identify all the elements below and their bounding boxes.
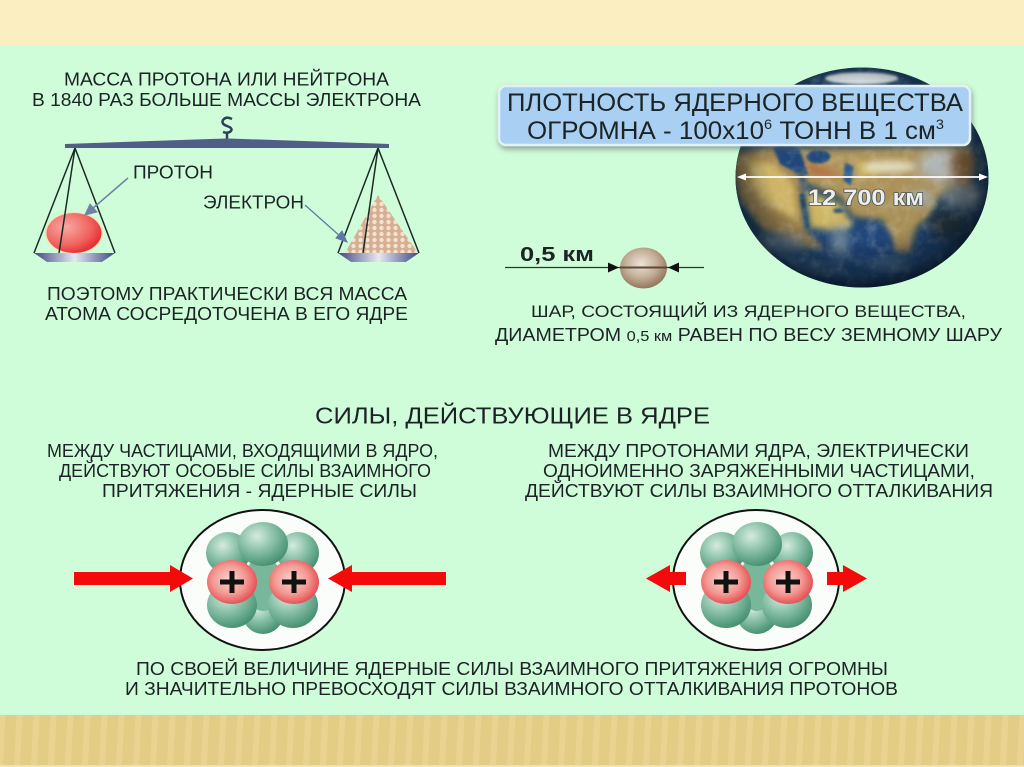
electron pile [345, 195, 418, 253]
repulsion line 1: МЕЖДУ ПРОТОНАМИ ЯДРА, ЭЛЕКТРИЧЕСКИ [548, 441, 969, 461]
diagram: attraction nucleus [74, 510, 446, 650]
right pan [338, 253, 419, 262]
heading: second line: В 1840 РАЗ БОЛЬШЕ МАССЫ ЭЛЕКТРОНА [32, 90, 421, 110]
diagram: repulsion nucleus [646, 510, 867, 650]
text block: proton repulsion [525, 441, 993, 501]
arrow: inward right [328, 565, 446, 592]
left pan strings [34, 148, 115, 253]
callout line 2: ОГРОМНА - 100х10 [527, 117, 755, 145]
callout line 2: 3 [936, 116, 944, 132]
proton right [269, 560, 319, 604]
callout line 2: ТОНН В 1 см [772, 117, 936, 145]
conclusion text line 1: ПОЭТОМУ ПРАКТИЧЕСКИ ВСЯ МАССА [47, 284, 407, 304]
proton ball [45, 212, 103, 254]
earth land and clouds [730, 72, 985, 287]
dimension arrowheads [608, 262, 679, 272]
proton left [701, 560, 751, 604]
callout line 2: 6 [764, 116, 772, 132]
label: earth diameter: 12 700 км [808, 185, 924, 210]
conclusion line 1: ПО СВОЕЙ ВЕЛИЧИНЕ ЯДЕРНЫЕ СИЛЫ ВЗАИМНОГО ПРИТЯЖЕНИЯ ОГРОМНЫ [136, 658, 888, 679]
heading: forces in nucleus: СИЛЫ, ДЕЙСТВУЮЩИЕ В ЯДРЕ [315, 402, 710, 428]
conclusion line 2: И ЗНАЧИТЕЛЬНО ПРЕВОСХОДЯТ СИЛЫ ВЗАИМНОГО ОТТАЛКИВАНИЯ ПРОТОНОВ [125, 679, 898, 699]
nucleons [700, 522, 813, 634]
dimension line [505, 266, 704, 268]
arrow: electron [305, 205, 347, 242]
proton left [207, 560, 257, 604]
panel: mass comparison [32, 68, 421, 324]
attraction line 2: ДЕЙСТВУЮТ ОСОБЫЕ СИЛЫ ВЗАИМНОГО [59, 460, 431, 481]
bottom band [0, 715, 1024, 767]
arrow: inward left [74, 565, 193, 592]
nucleons [206, 522, 319, 634]
nucleus outline [180, 510, 345, 650]
heading: mass of proton: МАССА ПРОТОНА ИЛИ НЕЙТРОНА [64, 68, 389, 90]
repulsion line 3: ДЕЙСТВУЮТ СИЛЫ ВЗАИМНОГО ОТТАЛКИВАНИЯ [525, 480, 993, 501]
top band [0, 0, 1024, 46]
dimension arrow: earth diameter [737, 174, 988, 180]
attraction line 1: МЕЖДУ ЧАСТИЦАМИ, ВХОДЯЩИМИ В ЯДРО, [47, 441, 438, 461]
conclusion text line 2: АТОМА СОСРЕДОТОЧЕНА В ЕГО ЯДРЕ [45, 304, 408, 324]
label: electron: ЭЛЕКТРОН [203, 192, 304, 212]
text block: conclusion [125, 658, 898, 699]
text block: nuclear attraction [47, 441, 438, 501]
icon: balance scale [34, 118, 419, 262]
label: proton: ПРОТОН [133, 162, 213, 182]
panel: small nuclear ball [505, 244, 704, 288]
callout: density of nuclear matter [499, 86, 970, 145]
caption line 1: ШАР, СОСТОЯЩИЙ ИЗ ЯДЕРНОГО ВЕЩЕСТВА, [531, 302, 966, 321]
caption: ball weight [495, 302, 1003, 345]
proton right [763, 560, 813, 604]
label: half kilometre: 0,5 км [520, 244, 594, 266]
arrow: outward left [646, 565, 686, 592]
arrow: proton [85, 178, 128, 215]
scale beam [65, 138, 389, 148]
nuclear matter ball [620, 248, 667, 288]
nucleus outline [673, 510, 839, 650]
right pan strings [338, 148, 419, 253]
arrow: outward right [827, 565, 867, 592]
left pan [34, 253, 115, 262]
scale hook [222, 118, 232, 140]
repulsion line 2: ОДНОИМЕННО ЗАРЯЖЕННЫМИ ЧАСТИЦАМИ, [543, 461, 975, 481]
callout line 1: ПЛОТНОСТЬ ЯДЕРНОГО ВЕЩЕСТВА [507, 89, 963, 117]
caption line 2: ДИАМЕТРОМ 0,5 км РАВЕН ПО ВЕСУ ЗЕМНОМУ ШАРУ [495, 325, 1003, 345]
icon: earth globe [736, 68, 988, 288]
attraction line 3: ПРИТЯЖЕНИЯ - ЯДЕРНЫЕ СИЛЫ [102, 481, 417, 501]
